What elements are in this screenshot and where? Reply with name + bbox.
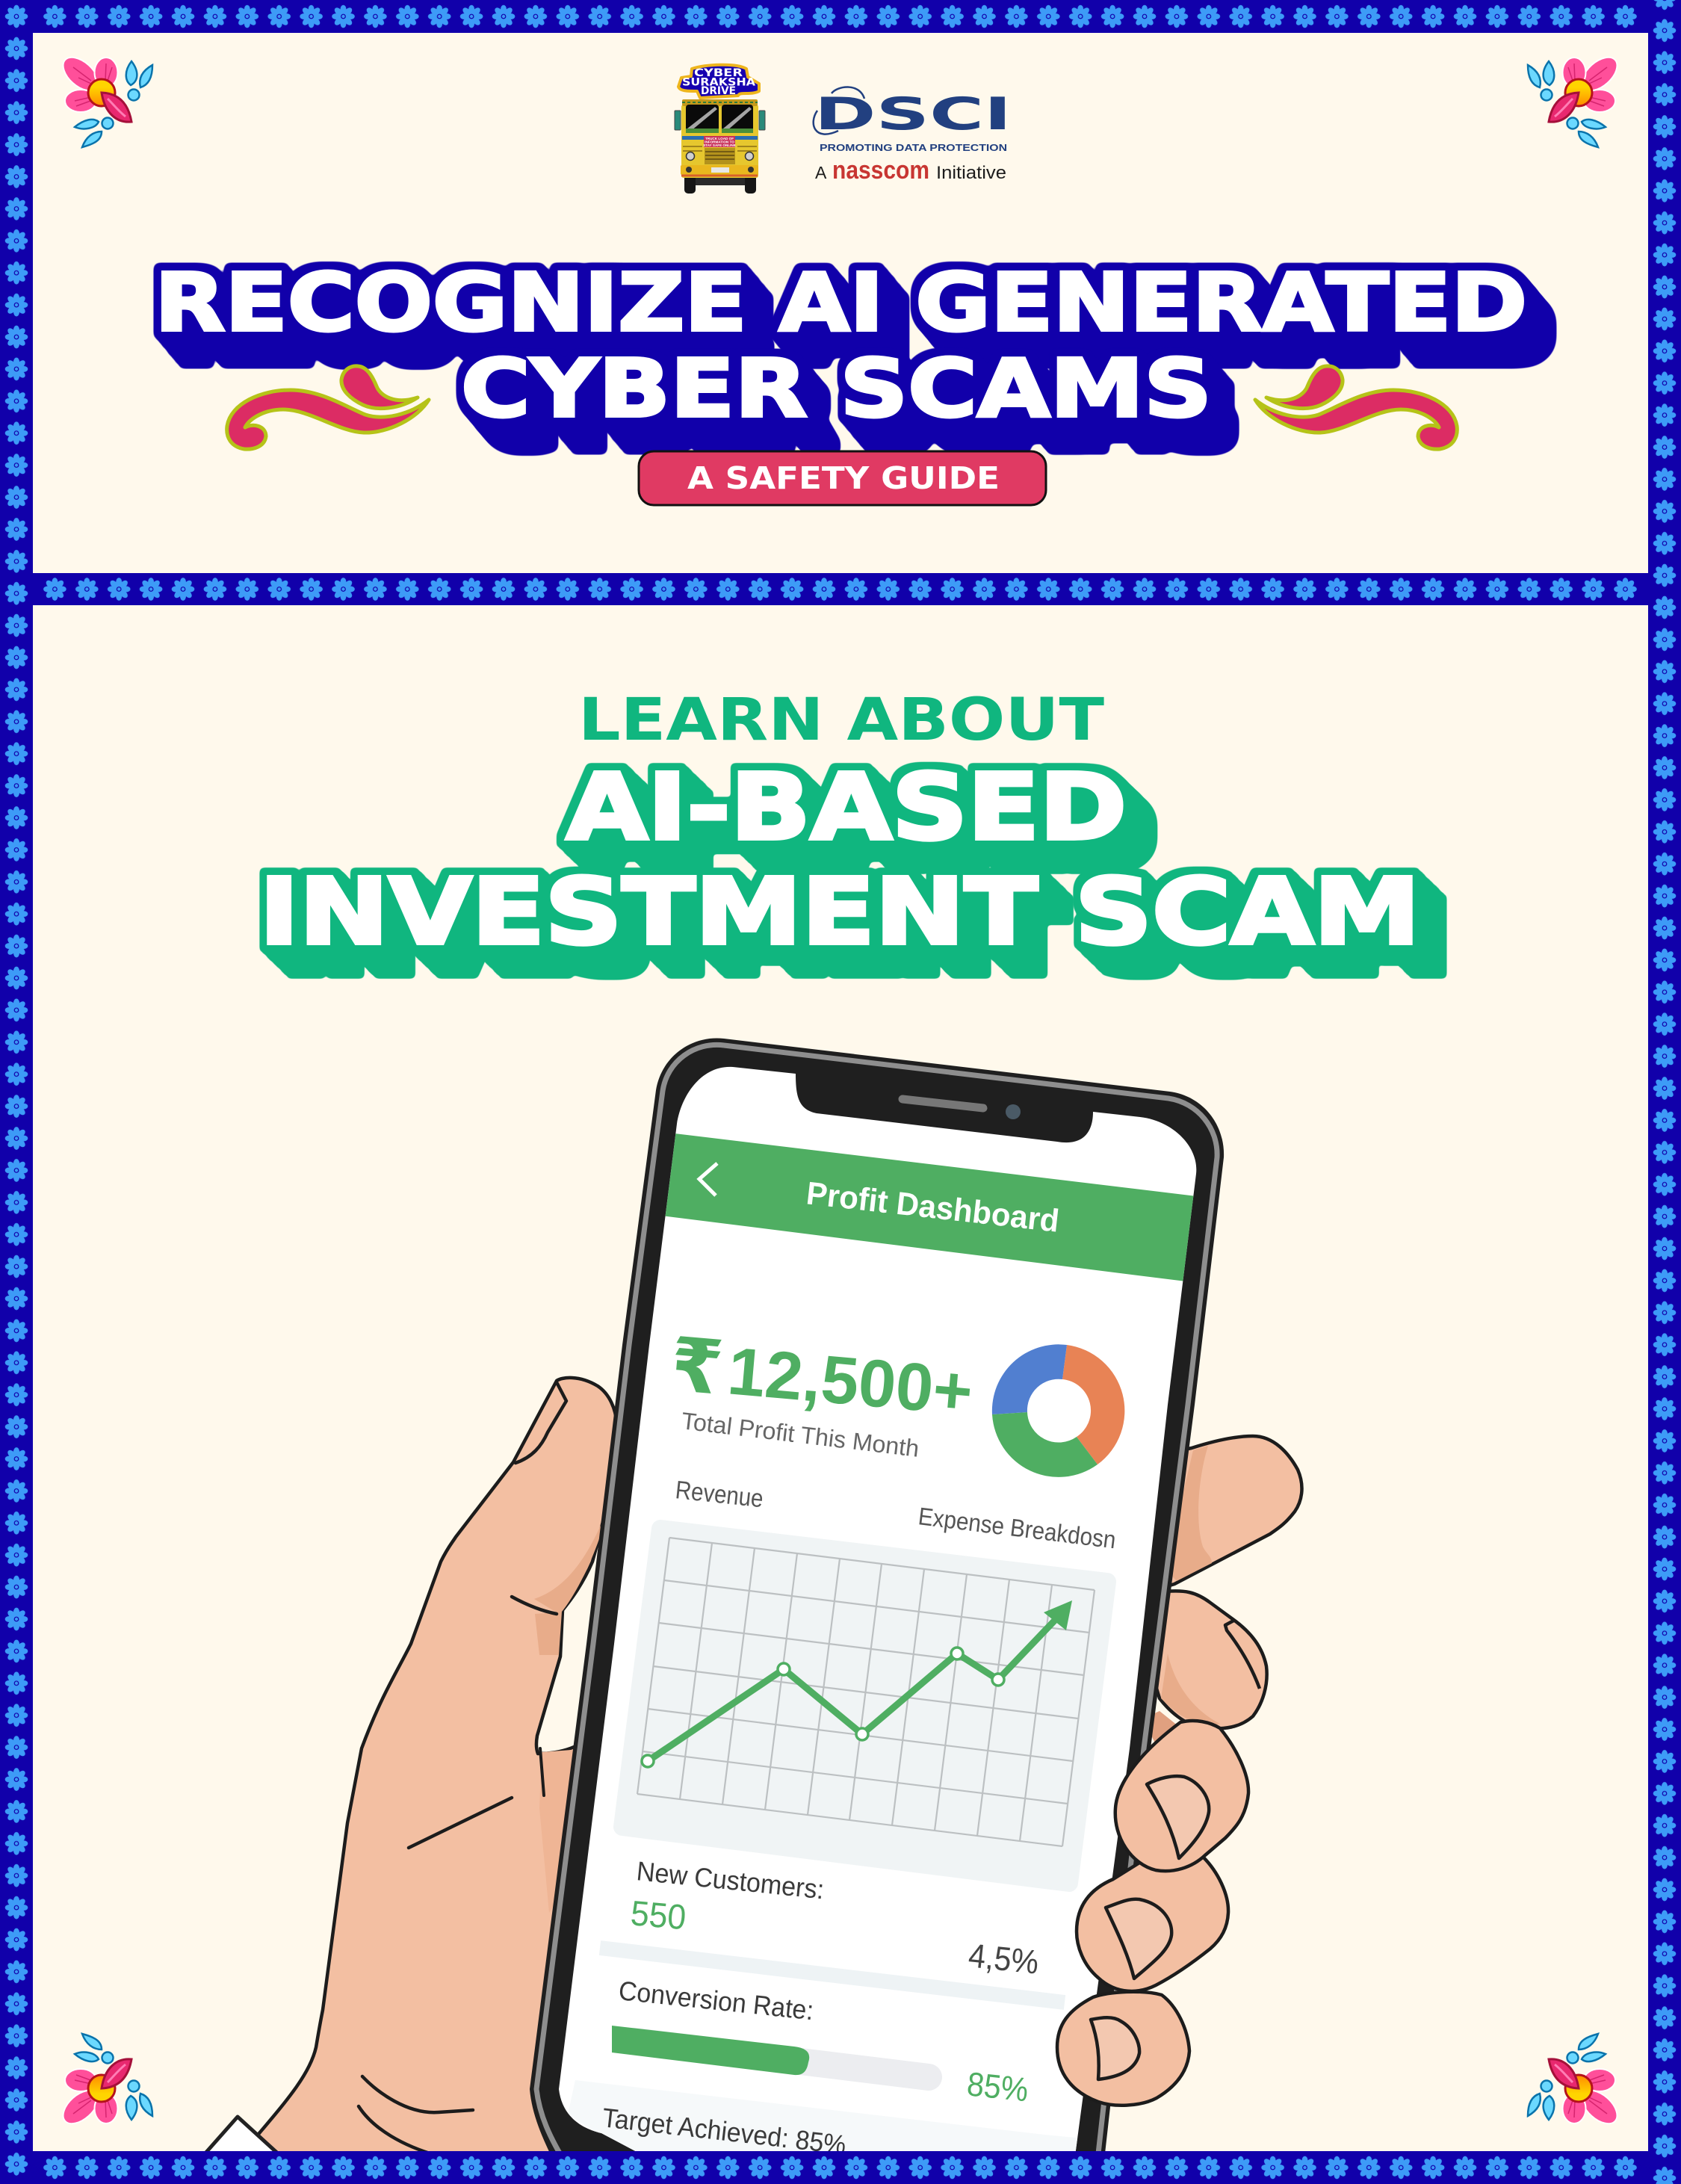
ornament: right swirl: [1255, 366, 1457, 449]
conversion rate stat: 85%: [965, 2064, 1030, 2109]
corner flower: bottom left: [57, 2034, 152, 2130]
ornament: left swirl: [227, 366, 429, 449]
finger 5 with nail: [1057, 1992, 1189, 2106]
title line 2: CYBER SCAMS: [461, 343, 1212, 436]
profit figure: Total Profit This Month: [680, 1407, 920, 1462]
truck roof sign: DRIVE: [701, 85, 736, 97]
truck body: [675, 99, 765, 194]
cuff: [203, 2117, 280, 2156]
chart labels: [674, 1476, 1118, 1553]
nasscom initiative line: A: [815, 163, 827, 182]
title line 1: RECOGNIZE AI GENERATED: [155, 257, 1527, 350]
icon: D swooshes: [814, 87, 864, 134]
chart labels: Revenue: [674, 1476, 764, 1513]
chart labels: Expense Breakdosn: [917, 1502, 1118, 1553]
icon: back arrow: [699, 1163, 717, 1195]
profit figure: ₹: [667, 1323, 726, 1411]
title: [155, 257, 1527, 436]
new customers stat: 4,5%: [967, 1936, 1041, 1982]
target achieved text: Target Achieved: 85%: [601, 2102, 848, 2160]
trend line: [642, 1600, 1072, 1767]
corner flower: top left: [57, 51, 152, 147]
phone screen: [559, 1067, 1197, 2151]
donut chart: [992, 1344, 1124, 1477]
subtitle pill: [639, 451, 1046, 505]
illustration: hand holding phone: [203, 1038, 1302, 2167]
new customers stat: [600, 1855, 1065, 2002]
conversion rate stat: [612, 1975, 1030, 2109]
screen header bar: [661, 1133, 1203, 1282]
subtitle pill: A SAFETY GUIDE: [687, 460, 1000, 496]
truck roof sign: SURAKSHA: [682, 76, 755, 88]
truck body: STAY SAFE ONLINE: [703, 143, 736, 147]
new customers stat: 550: [629, 1893, 687, 1937]
truck body: INFORMATION TO: [705, 140, 734, 143]
header title: Profit Dashboard: [805, 1175, 1061, 1240]
heading line 2: INVESTMENT SCAM: [259, 859, 1420, 965]
truck roof sign: CYBER: [694, 67, 743, 79]
profit figure: [667, 1323, 976, 1462]
new customers stat: New Customers:: [635, 1855, 826, 1905]
corner flower: bottom right: [1528, 2034, 1623, 2130]
line chart card: [622, 1529, 1107, 1883]
finger 3 with nail: [1115, 1721, 1248, 1871]
truck body: TRUCK LOAD OF: [705, 137, 734, 140]
corner flower: top right: [1528, 51, 1623, 147]
finger 4 with nail: [1077, 1857, 1228, 1991]
truck roof sign: [678, 65, 759, 98]
logo: Cyber Suraksha Drive truck: [675, 65, 765, 194]
tagline: PROMOTING DATA PROTECTION: [820, 142, 1007, 153]
hand palm and thumb: [224, 1378, 635, 2167]
logo: DSCI: [814, 87, 1012, 185]
profit figure: 12,500+: [725, 1334, 976, 1430]
nasscom initiative line: nasscom: [832, 156, 929, 185]
nasscom initiative line: [815, 156, 1006, 185]
conversion rate stat: Conversion Rate:: [617, 1975, 815, 2026]
speaker and camera: [903, 1099, 1021, 1119]
finger 2 behind phone: [1143, 1591, 1267, 1745]
section kicker: learn about: LEARN ABOUT: [578, 687, 1104, 754]
heading line 1: AI-BASED: [566, 755, 1127, 861]
DSCI wordmark: DSCI: [814, 88, 1012, 140]
finger 1 behind phone: [1151, 1436, 1302, 1591]
bottom card background: [568, 2080, 1083, 2167]
section heading: [259, 755, 1420, 965]
nasscom initiative line: Initiative: [936, 163, 1006, 183]
phone frame: [530, 1038, 1224, 2167]
